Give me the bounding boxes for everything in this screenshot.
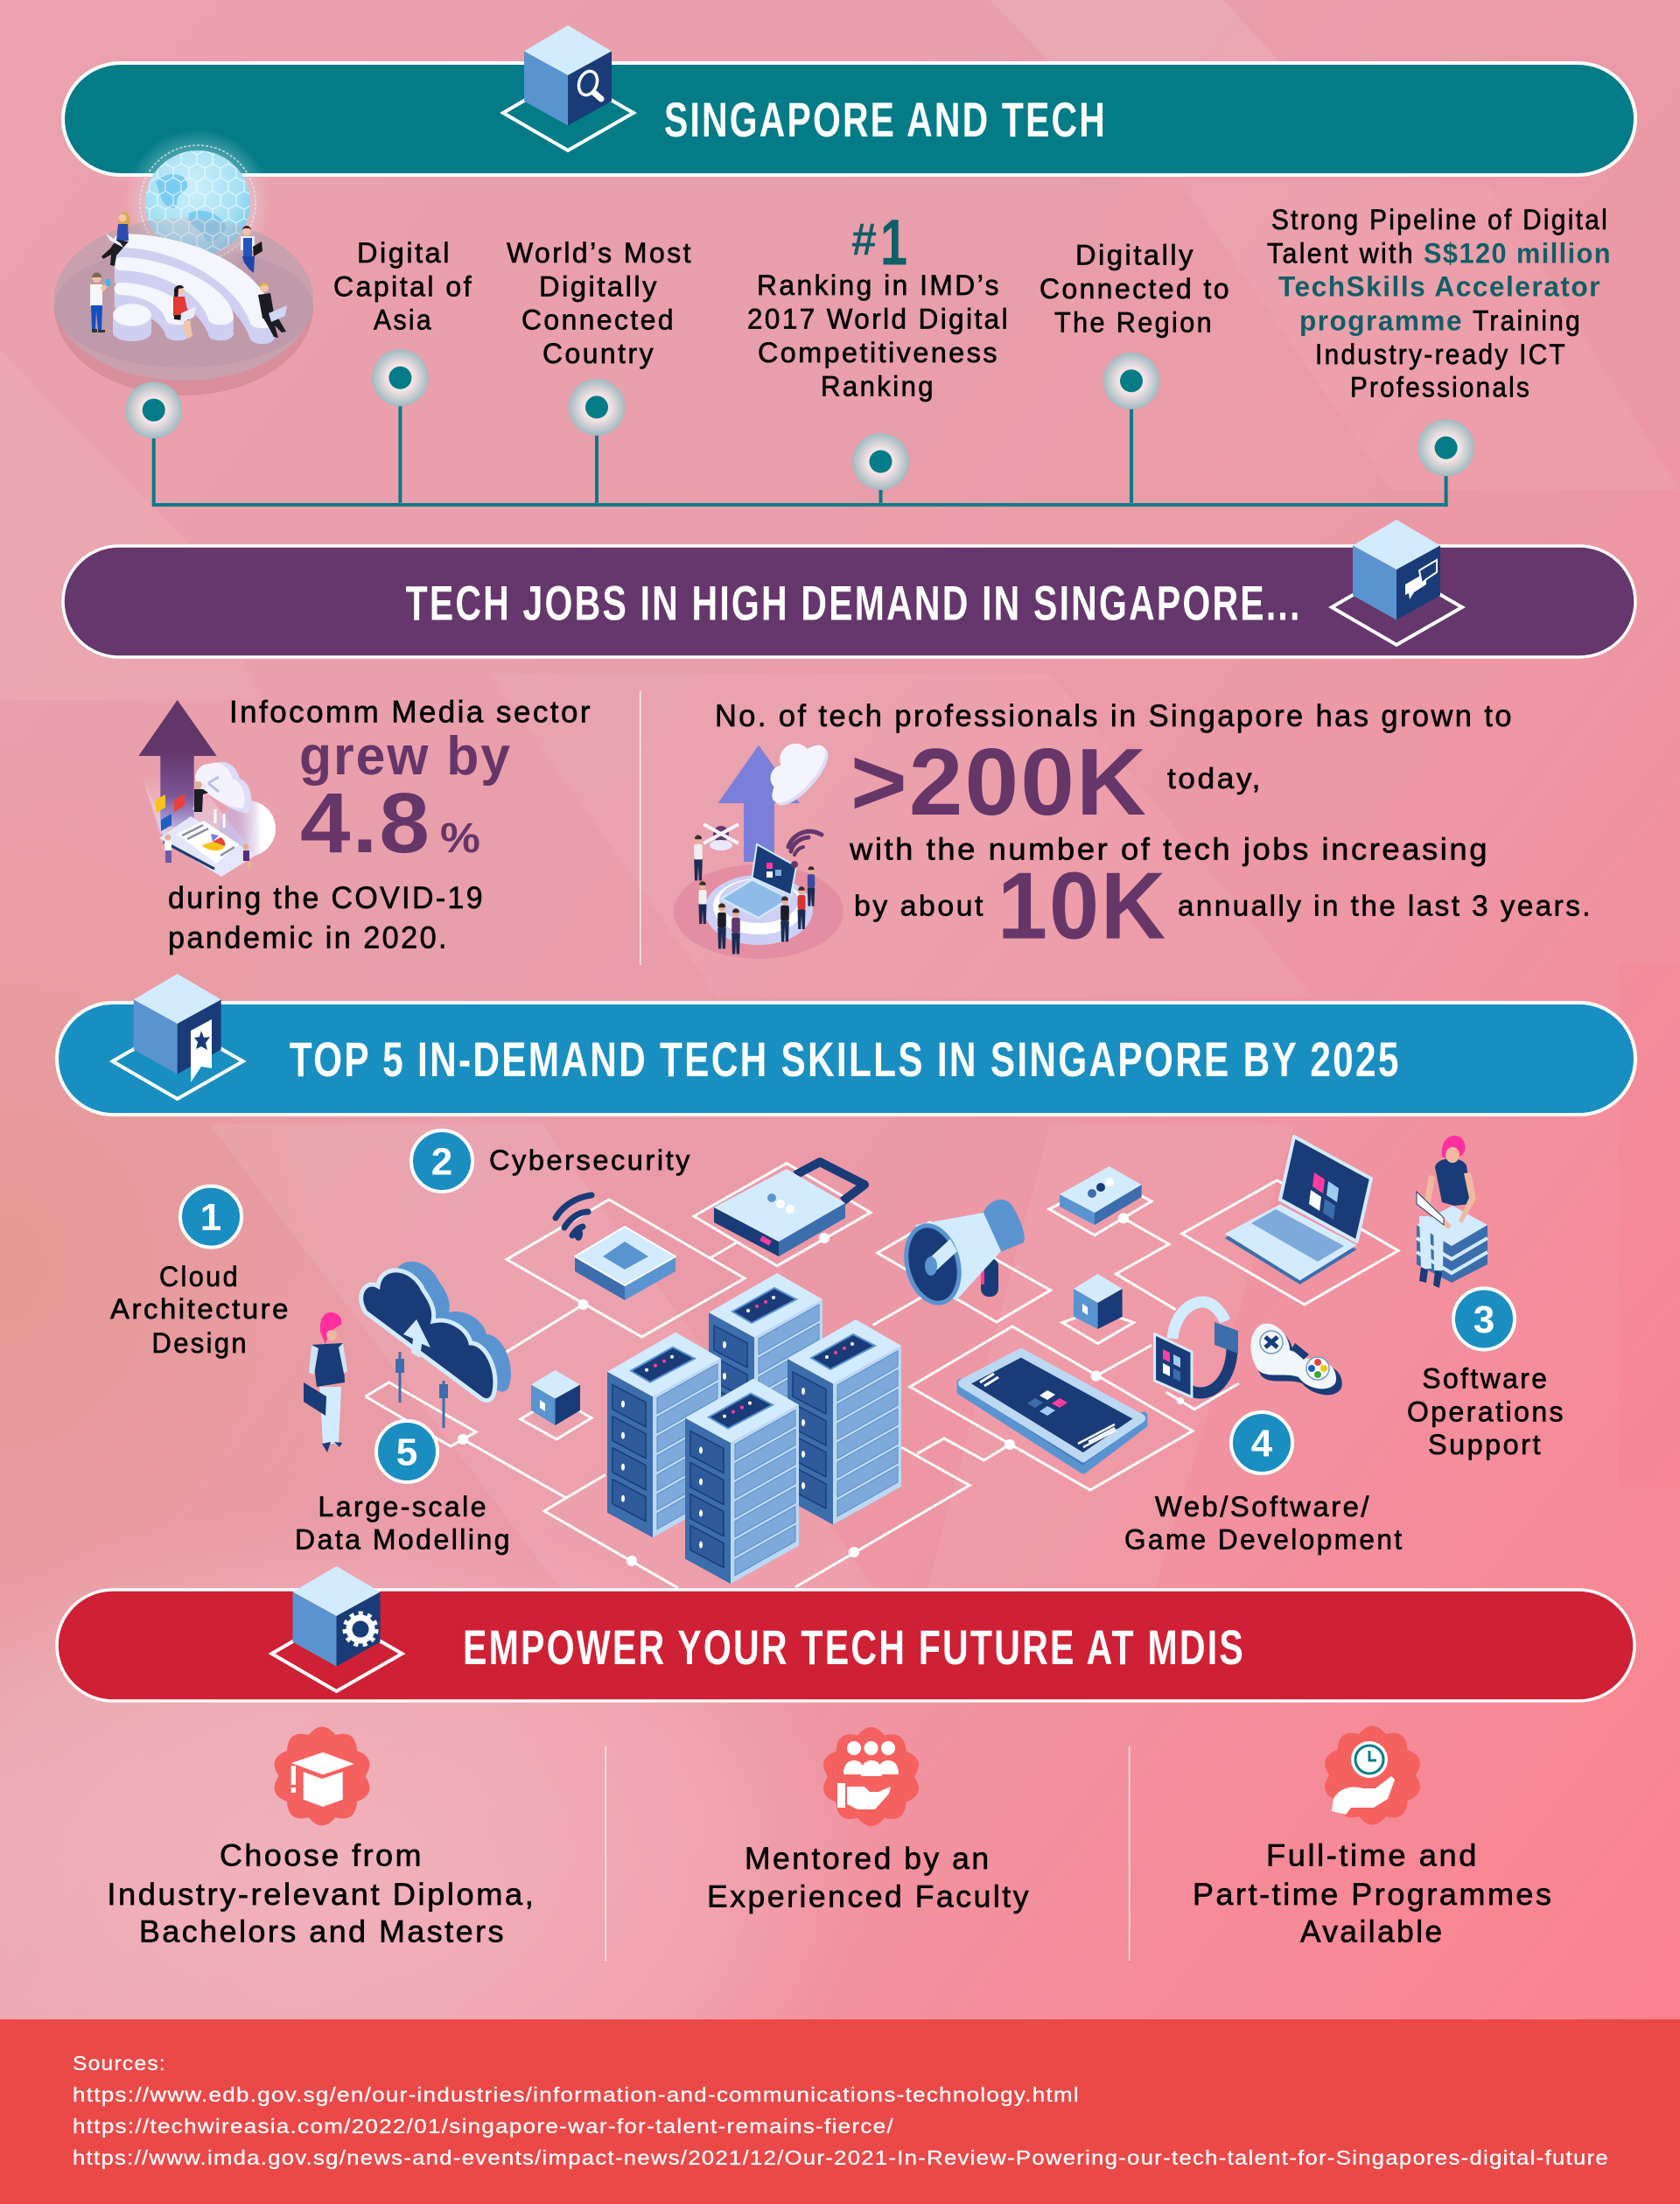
footer: sources: https://techwireasia.com/2022/01/singapore-war-for-talent-remains-fierce/ [73,2115,894,2138]
skill 1: cloud architecture design [110,1186,290,1359]
text: strong pipeline of digital talent: Training [1473,304,1582,336]
illustration: game controller [1250,1324,1342,1395]
skill 3: software operations support: Software [1422,1363,1549,1395]
illustration: phone [961,1353,1144,1470]
divider [1129,1746,1130,1961]
skill 4: web software game development: Web/Software/ [1155,1491,1371,1522]
text: number one ranking [747,206,1010,402]
illustration: growth arrow and cloud [138,700,276,877]
illustration: small cube centre [1074,1274,1123,1329]
text: tech professionals stats: 10K [998,853,1167,960]
icon: magnifier cube [503,25,634,150]
skill 4: web software game development: 4 [1251,1423,1273,1465]
person: woman in red [173,285,196,338]
text: choose from: Choose from [220,1838,424,1872]
skill 4: web software game development [1124,1412,1404,1556]
panel: tech jobs header [63,546,1635,657]
text: choose from: Bachelors and Masters [139,1914,506,1949]
footer: sources: https://www.imda.gov.sg/news-and-events/impact-news/2021/12/Our-2021-In-Review-Powering-our-tech-talent-for-Singapores-digital-future [73,2146,1609,2169]
person: man with phone [90,273,110,332]
panel: singapore and tech header [63,63,1635,175]
illustration: lock device [714,1162,864,1256]
skill 4: web software game development: Game Development [1124,1524,1404,1556]
illustration: person on server stack [1417,1136,1488,1288]
text: infocomm media sector: Infocomm Media sector [229,695,592,730]
text: infocomm media sector: % [440,815,482,862]
skill 3: software operations support: 3 [1474,1298,1494,1341]
text: mentored by: Experienced Faculty [707,1880,1031,1914]
text: infocomm media sector: grew by [299,726,512,787]
text: number one ranking: # [851,214,877,265]
text: infocomm media sector: during the COVID-19 [168,881,485,915]
skill 2: cybersecurity: 2 [431,1141,452,1183]
text: number one ranking: 1 [880,206,907,278]
text: strong pipeline of digital talent: Strong Pipeline of Digital [1271,204,1609,235]
skill 2: cybersecurity: Cybersecurity [489,1144,692,1176]
illustration: server racks [607,1273,901,1584]
text: strong pipeline of digital talent: S$120 million [1424,238,1612,269]
text: tech professionals stats: >200K [850,729,1148,836]
skill 1: cloud architecture design: 1 [200,1196,221,1239]
person: seated woman [243,843,251,869]
person: worker in overalls [241,226,262,273]
skill 5: large-scale data modelling: 5 [396,1431,417,1473]
badge: graduation cap [275,1726,369,1826]
person: man on ladder [194,781,208,812]
illustration: small cube left [531,1370,580,1425]
icon: bookmark cube [113,974,243,1099]
text: full-time and part-time: Part-time Programmes [1193,1878,1554,1912]
illustration: megaphone [899,1200,1025,1309]
text: world's most digitally connected country: Country [542,338,655,369]
illustration: laptop platform and people [674,728,844,959]
text: world's most digitally connected country: Connected [522,304,676,336]
text: digital capital of asia: Capital of [333,271,473,303]
text: full-time and part-time [1193,1838,1554,1949]
person: man in suit [258,283,287,338]
text: digital capital of asia: Asia [374,304,433,336]
skill 1: cloud architecture design: Cloud [159,1261,240,1292]
text: strong pipeline of digital talent: Talent with [1267,238,1415,269]
skill 5: large-scale data modelling [295,1421,512,1556]
text: strong pipeline of digital talent: programme [1299,304,1463,336]
footer: sources [0,2019,1680,2204]
text: number one ranking: Ranking [821,371,935,402]
skill 5: large-scale data modelling: Data Modelling [295,1524,512,1556]
text: digitally connected to the region: Digitally [1075,240,1195,271]
text: strong pipeline of digital talent: TechSkills Accelerator [1278,271,1601,303]
illustration: router with wifi [556,1195,676,1300]
panel: empower header [57,1590,1634,1701]
icon: gear cube [271,1566,402,1691]
text: tech professionals stats: today, [1167,762,1263,794]
illustration: smartwatch [1155,1302,1238,1397]
text: world's most digitally connected country [507,237,693,369]
panel: empower header: EMPOWER YOUR TECH FUTURE AT MDIS [463,1620,1245,1675]
footer: sources: Sources: [73,2052,166,2075]
icon: chat cube [1332,520,1462,645]
text: tech professionals stats [715,699,1592,960]
footer: sources: https://www.edb.gov.sg/en/our-industries/information-and-communications-technology.html [73,2083,1080,2106]
text: digitally connected to the region [1040,240,1231,338]
text: digitally connected to the region: Connected to [1040,273,1231,304]
network lines [366,1164,1398,1588]
illustration: cloud and woman [304,1262,511,1452]
text: tech professionals stats: by about [854,890,985,922]
person: woman with laptop on top arc [102,212,130,266]
text: number one ranking: 2017 World Digital [747,303,1010,334]
text: infocomm media sector: pandemic in 2020. [168,920,449,955]
skill 1: cloud architecture design: Design [152,1327,248,1359]
text: strong pipeline of digital talent: Professionals [1350,371,1531,402]
text: full-time and part-time: Full-time and [1266,1838,1479,1872]
text: tech professionals stats: annually in the last 3 years. [1178,890,1592,922]
text: number one ranking: Ranking in IMD’s [757,269,1001,301]
text: full-time and part-time: Available [1300,1914,1445,1949]
person: small man [164,835,172,863]
text: tech professionals stats: No. of tech professionals in Singapore has grown to [715,699,1514,733]
skill 3: software operations support: Operations [1407,1396,1565,1427]
text: mentored by [707,1842,1031,1914]
badge: mentors and hand [823,1727,919,1826]
text: mentored by: Mentored by an [745,1842,991,1876]
skill 1: cloud architecture design: Architecture [110,1293,290,1325]
text: strong pipeline of digital talent [1267,204,1612,402]
text: choose from: Industry-relevant Diploma, [107,1878,536,1912]
text: tech professionals stats: with the number of tech jobs increasing [849,833,1489,866]
panel: singapore and tech header: SINGAPORE AND TECH [664,92,1107,147]
skill 3: software operations support [1407,1288,1565,1460]
text: digitally connected to the region: The Region [1054,306,1214,338]
text: world's most digitally connected country: Digitally [539,271,659,303]
skill 2: cybersecurity [411,1130,692,1192]
text: world's most digitally connected country: World’s Most [507,237,693,269]
skill 3: software operations support: Support [1428,1429,1543,1460]
skill 5: large-scale data modelling: Large-scale [318,1491,488,1522]
illustration: laptop [1225,1137,1371,1284]
text: strong pipeline of digital talent: Industry-ready ICT [1315,339,1567,370]
timeline [125,349,1474,505]
badge: clock in hand [1325,1725,1420,1825]
text: digital capital of asia: Digital [357,237,452,269]
text: number one ranking: Competitiveness [758,337,999,368]
text: choose from [107,1838,536,1949]
text: digital capital of asia [333,237,473,336]
text: infocomm media sector: 4.8 [300,775,431,871]
illustration: wifi globe and people [54,129,313,395]
panel: tech jobs header: TECH JOBS IN HIGH DEMAND IN SINGAPORE... [406,575,1302,630]
panel: top 5 skills header [57,1003,1635,1115]
illustration: small box [1060,1166,1142,1225]
text: infocomm media sector [168,695,592,955]
